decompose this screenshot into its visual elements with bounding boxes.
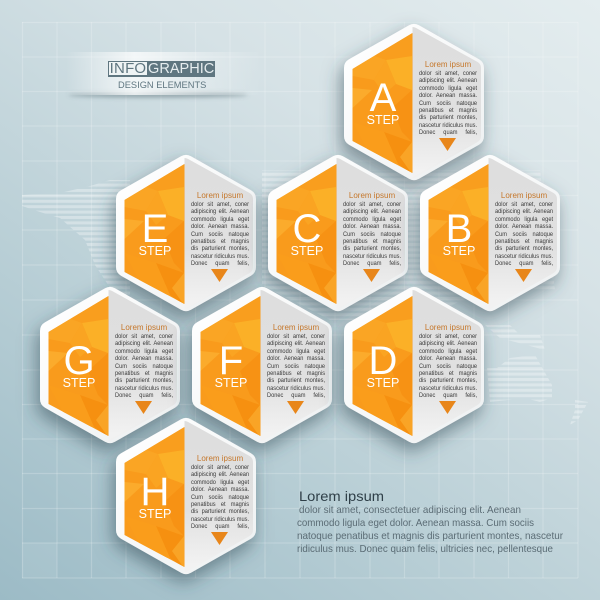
body text: penatibus et magnis — [495, 238, 553, 245]
body text: dis parturient montes, — [419, 377, 477, 384]
body text: adipiscing elit. Aenean — [343, 208, 401, 215]
body text: Cum sociis natoque — [343, 231, 401, 238]
step label: STEP — [367, 113, 399, 127]
bottom paragraph: dolor sit amet, consectetuer adipiscing elit. Aenean — [299, 504, 521, 516]
body text: dis parturient montes, — [191, 508, 249, 515]
body text: dolor. Aenean massa. — [343, 223, 401, 230]
hexagon A — [328, 21, 494, 198]
body text: penatibus et magnis — [115, 370, 173, 377]
body text: adipiscing elit. Aenean — [419, 77, 477, 84]
body text: Cum sociis natoque — [495, 231, 553, 238]
step label: STEP — [443, 244, 475, 258]
body text: Donec quam felis, — [495, 260, 553, 267]
body text: Donec quam felis, — [191, 523, 249, 530]
body text: penatibus et magnis — [419, 370, 477, 377]
letter: B — [446, 207, 472, 251]
body text — [495, 201, 554, 267]
letter: F — [219, 339, 243, 383]
heading: Lorem ipsum — [273, 323, 319, 332]
body text: penatibus et magnis — [267, 370, 325, 377]
title banner — [69, 52, 247, 100]
body text: nascetur ridiculus mus. — [267, 385, 325, 392]
letter: A — [370, 76, 396, 120]
hexagon F — [176, 286, 340, 461]
hexagon B — [404, 152, 570, 330]
body text: dis parturient montes, — [343, 245, 401, 252]
body text: dolor sit amet, coner — [495, 201, 553, 208]
body text: dolor. Aenean massa. — [495, 223, 553, 230]
body text — [191, 464, 250, 530]
body text: Donec quam felis, — [267, 392, 325, 399]
body text: Cum sociis natoque — [115, 363, 173, 370]
body text: penatibus et magnis — [419, 107, 477, 114]
body text: dolor sit amet, coner — [419, 70, 477, 77]
heading: Lorem ipsum — [121, 323, 167, 332]
step label: STEP — [63, 376, 95, 390]
hexagon shape with orange panel and arrow — [252, 152, 417, 330]
heading: Lorem ipsum — [501, 191, 547, 200]
body text: adipiscing elit. Aenean — [191, 471, 249, 478]
body text: dolor. Aenean massa. — [419, 355, 477, 362]
heading: Lorem ipsum — [425, 323, 471, 332]
body text: commodo ligula eget — [419, 85, 477, 92]
body text: adipiscing elit. Aenean — [267, 340, 325, 347]
body text: adipiscing elit. Aenean — [495, 208, 553, 215]
hexagon E — [100, 152, 265, 329]
hexagon D — [328, 285, 494, 461]
hexagon shape with orange panel and arrow — [404, 152, 570, 330]
step label: STEP — [367, 376, 399, 390]
body text: dis parturient montes, — [495, 245, 553, 252]
body text: dolor sit amet, coner — [343, 201, 401, 208]
subtitle: DESIGN ELEMENTS — [118, 80, 206, 90]
body text: commodo ligula eget — [419, 348, 477, 355]
bottom paragraph: ridiculus mus. Donec quam felis, ultricies nec, pellentesque — [297, 543, 553, 555]
body text — [115, 333, 174, 399]
body text: nascetur ridiculus mus. — [343, 253, 401, 260]
body text: Cum sociis natoque — [191, 231, 249, 238]
body text: dis parturient montes, — [191, 245, 249, 252]
body text: commodo ligula eget — [191, 216, 249, 223]
bottom paragraph — [297, 504, 563, 555]
letter: H — [141, 470, 169, 514]
body text: dolor sit amet, coner — [115, 333, 173, 340]
body text: Donec quam felis, — [343, 260, 401, 267]
step label: STEP — [139, 244, 171, 258]
body text: commodo ligula eget — [495, 216, 553, 223]
body text: dolor. Aenean massa. — [191, 486, 249, 493]
body text: commodo ligula eget — [115, 348, 173, 355]
body text: dolor sit amet, coner — [267, 333, 325, 340]
letter: D — [369, 339, 397, 383]
hexagon G — [24, 285, 188, 460]
body text: penatibus et magnis — [191, 501, 249, 508]
step label: STEP — [215, 376, 247, 390]
body text: nascetur ridiculus mus. — [191, 253, 249, 260]
body text: adipiscing elit. Aenean — [191, 208, 249, 215]
bottom paragraph: natoque penatibus et magnis dis parturient montes, nascetur — [297, 530, 563, 542]
bottom paragraph: commodo ligula eget dolor. Aenean massa. Cum sociis — [297, 517, 534, 529]
bottom heading: Lorem ipsum — [299, 488, 384, 504]
body text: nascetur ridiculus mus. — [495, 253, 553, 260]
body text: dolor. Aenean massa. — [419, 92, 477, 99]
body text: commodo ligula eget — [343, 216, 401, 223]
hexagon shape with orange panel and arrow — [24, 285, 188, 460]
body text: dis parturient montes, — [115, 377, 173, 384]
letter: C — [293, 207, 321, 251]
body text: dolor sit amet, coner — [419, 333, 477, 340]
body text — [191, 201, 249, 267]
body text: nascetur ridiculus mus. — [419, 385, 477, 392]
body text: dolor. Aenean massa. — [115, 355, 173, 362]
body text — [419, 70, 478, 136]
body text: dolor. Aenean massa. — [267, 355, 325, 362]
body text: dolor. Aenean massa. — [191, 223, 249, 230]
body text: adipiscing elit. Aenean — [115, 340, 173, 347]
body text: dolor sit amet, coner — [191, 201, 249, 208]
heading: Lorem ipsum — [197, 191, 243, 200]
body text: Cum sociis natoque — [419, 363, 477, 370]
body text — [419, 333, 478, 399]
body text — [267, 333, 325, 399]
step label: STEP — [139, 507, 171, 521]
letter: E — [142, 207, 168, 251]
body text: Donec quam felis, — [419, 129, 477, 136]
hexagon shape with orange panel and arrow — [328, 285, 494, 461]
body text: Donec quam felis, — [115, 392, 173, 399]
heading: Lorem ipsum — [349, 191, 395, 200]
body text: nascetur ridiculus mus. — [115, 385, 173, 392]
body text: Cum sociis natoque — [267, 363, 325, 370]
hexagon H — [100, 416, 266, 592]
step label: STEP — [291, 244, 323, 258]
bottom text block — [297, 488, 563, 555]
body text: Cum sociis natoque — [191, 494, 249, 501]
body text: commodo ligula eget — [267, 348, 325, 355]
heading: Lorem ipsum — [425, 60, 471, 69]
body text: nascetur ridiculus mus. — [191, 516, 249, 523]
body text: Donec quam felis, — [191, 260, 249, 267]
body text: adipiscing elit. Aenean — [419, 340, 477, 347]
body text: dis parturient montes, — [419, 114, 477, 121]
body text: nascetur ridiculus mus. — [419, 122, 477, 129]
INFOGRAPHIC logo — [108, 61, 215, 77]
hexagon shape with orange panel and arrow — [100, 152, 265, 329]
heading: Lorem ipsum — [197, 454, 243, 463]
hexagon shape with orange panel and arrow — [328, 21, 494, 198]
hexagon C — [252, 152, 417, 330]
body text: Cum sociis natoque — [419, 100, 477, 107]
body text: dis parturient montes, — [267, 377, 325, 384]
body text: penatibus et magnis — [343, 238, 401, 245]
body text — [343, 201, 402, 267]
body text: Donec quam felis, — [419, 392, 477, 399]
hexagon shape with orange panel and arrow — [176, 286, 340, 461]
hexagon shape with orange panel and arrow — [100, 416, 266, 592]
body text: penatibus et magnis — [191, 238, 249, 245]
body text: commodo ligula eget — [191, 479, 249, 486]
body text: dolor sit amet, coner — [191, 464, 249, 471]
letter: G — [63, 339, 95, 383]
